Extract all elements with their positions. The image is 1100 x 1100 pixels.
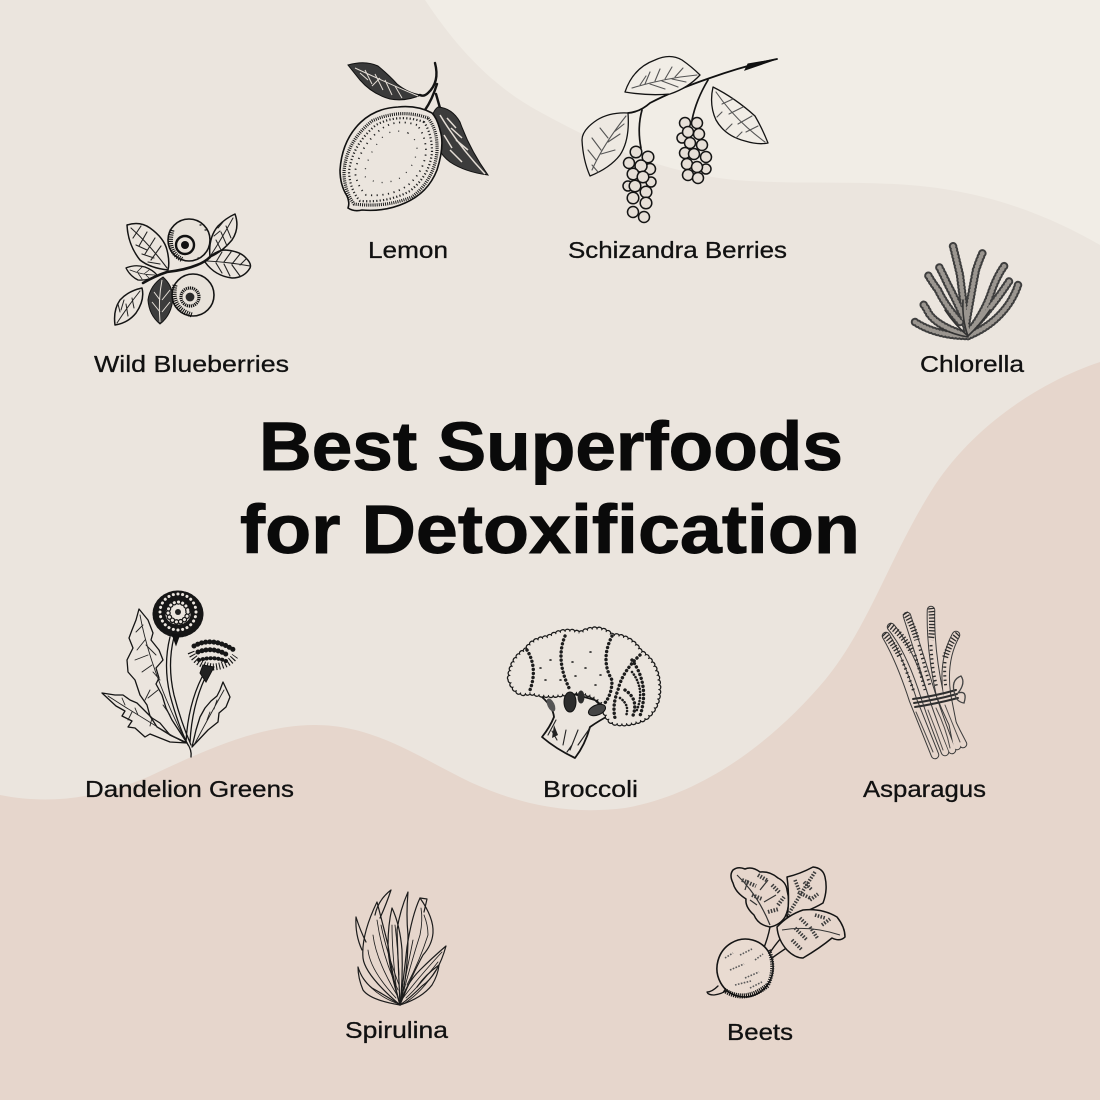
- label: Dandelion Greens: Dandelion Greens: [85, 776, 294, 802]
- icon: lemon: [340, 63, 488, 211]
- background: light wave top right: [425, 0, 1100, 245]
- label: Schizandra Berries: Schizandra Berries: [568, 237, 787, 263]
- title: for Detoxification: [240, 491, 860, 568]
- title: Best Superfoods: [259, 408, 843, 485]
- label: Broccoli: Broccoli: [543, 776, 638, 802]
- icon: broccoli: [510, 629, 658, 758]
- icon: chlorella: [915, 246, 1018, 337]
- label: Wild Blueberries: Wild Blueberries: [94, 351, 289, 377]
- icon: wild blueberries: [115, 214, 250, 325]
- icon: asparagus: [884, 608, 965, 755]
- icon: spirulina: [356, 890, 446, 1005]
- label: Asparagus: Asparagus: [863, 776, 986, 802]
- background: pink wave bottom: [0, 362, 1100, 1100]
- icon: dandelion greens: [102, 594, 235, 757]
- icon: schizandra berries: [582, 56, 777, 222]
- label: Chlorella: Chlorella: [920, 351, 1025, 377]
- label: Beets: Beets: [727, 1019, 793, 1045]
- icon: beets: [707, 867, 845, 1003]
- label: Spirulina: Spirulina: [345, 1017, 449, 1043]
- title: [240, 408, 860, 568]
- label: Lemon: Lemon: [368, 237, 448, 263]
